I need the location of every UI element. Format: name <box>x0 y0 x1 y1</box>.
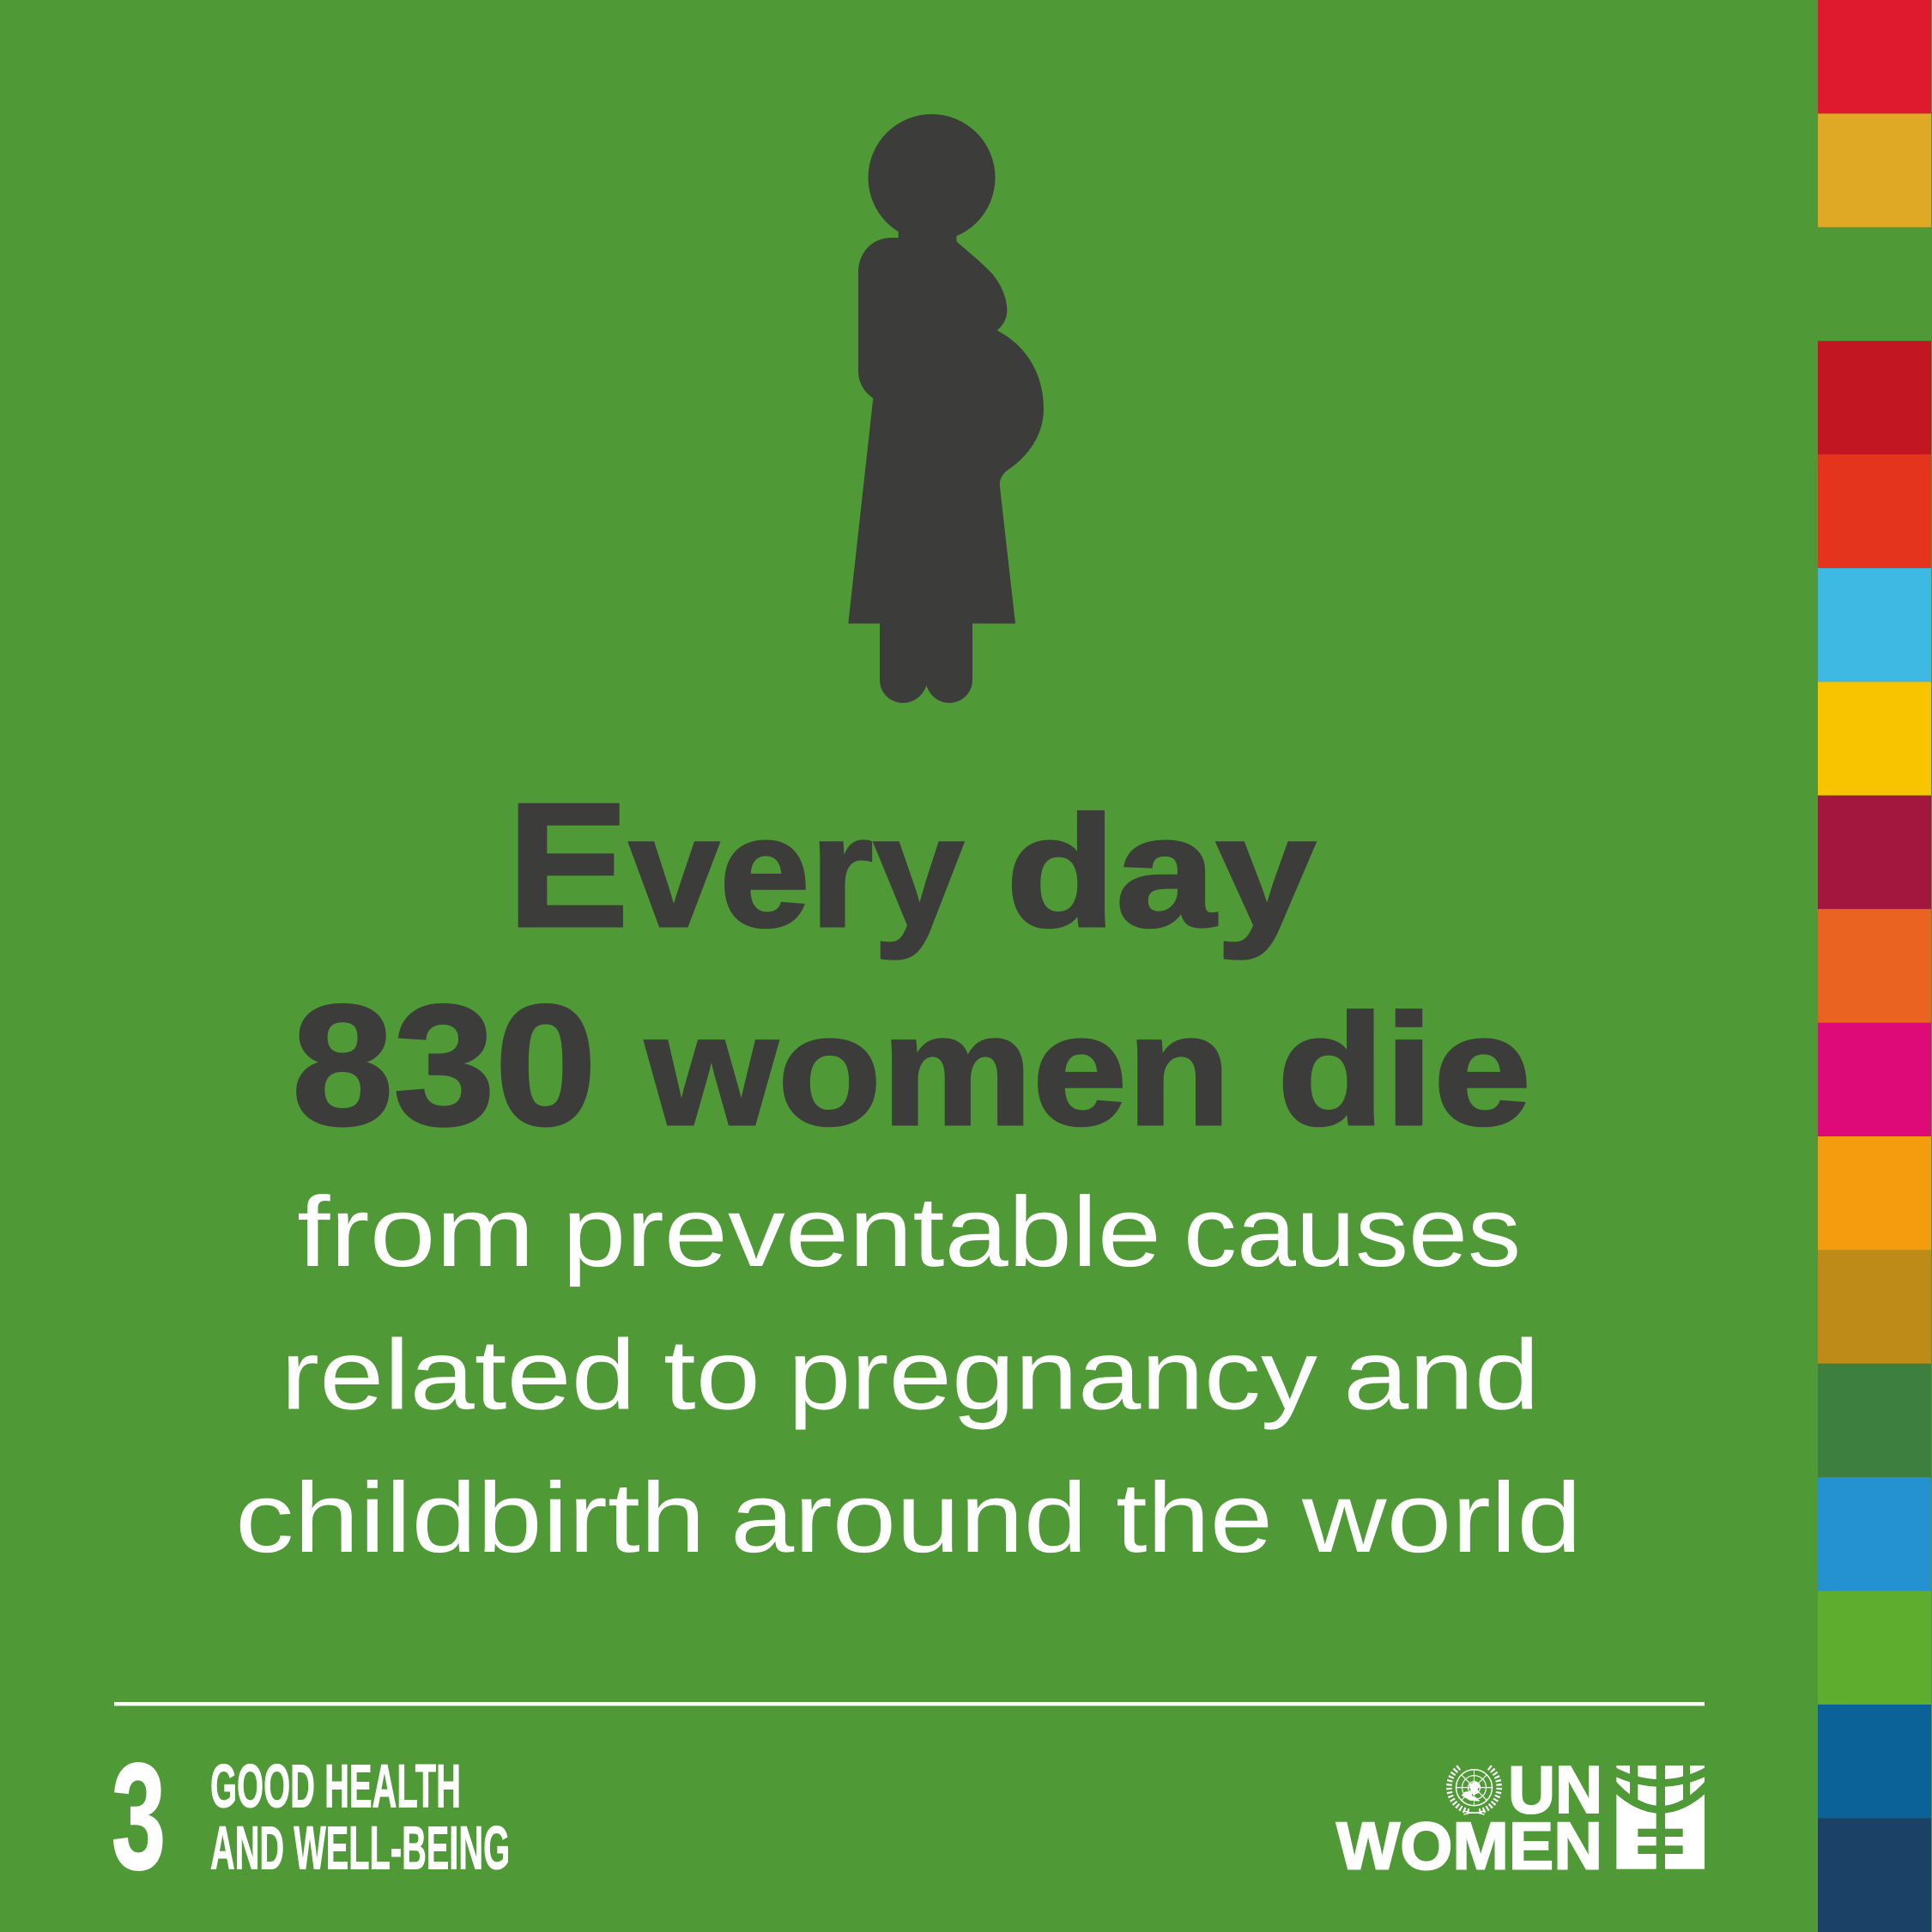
logo wordmark UN: UN <box>1508 1752 1602 1827</box>
subtext: from preventable causes <box>235 1176 1582 1573</box>
goal title line 1: GOOD HEALTH <box>210 1753 461 1821</box>
logo wordmark WOMEN: WOMEN <box>1336 1808 1602 1883</box>
subtext line 3: childbirth <box>235 1462 706 1573</box>
logo: UN Women <box>1336 1752 1707 1883</box>
goal number 3: 3 <box>112 1733 166 1901</box>
heading line 2: die <box>1277 981 1531 1158</box>
subtext line 2: related <box>281 1318 636 1430</box>
subtext line 3: around <box>730 1462 1087 1573</box>
subtext line 2: to <box>663 1318 760 1430</box>
SDG colour strip <box>1818 0 1931 1932</box>
heading line 1: Every <box>507 766 964 964</box>
subtext line 3: the <box>1116 1462 1273 1573</box>
subtext line 1: from <box>297 1176 535 1287</box>
icon: pregnant woman silhouette <box>848 114 1044 703</box>
subtext line 1 <box>297 1176 1521 1287</box>
heading: Every day 830 women die <box>292 766 1531 1161</box>
footer divider <box>114 1702 1705 1706</box>
logo emblem: UN globe and wreath <box>1449 1767 1499 1814</box>
heading line 1: day <box>1006 783 1316 960</box>
heading line 2: women <box>645 981 1231 1158</box>
heading line 1 <box>507 766 1316 964</box>
goal title line 2: AND WELL-BEING <box>210 1814 510 1883</box>
subtext line 3: world <box>1301 1462 1582 1573</box>
subtext line 1: causes <box>1184 1176 1521 1287</box>
heading line 2: 830 <box>292 970 597 1161</box>
logo mark: globe and venus symbol <box>1614 1764 1707 1870</box>
subtext line 2: and <box>1343 1318 1540 1430</box>
subtext line 3 <box>235 1462 1582 1573</box>
subtext line 2 <box>281 1318 1540 1430</box>
heading line 2 <box>292 970 1531 1161</box>
goal title: good health and well-being <box>210 1753 510 1883</box>
subtext line 2: pregnancy <box>788 1318 1317 1430</box>
subtext line 1: preventable <box>562 1176 1161 1287</box>
